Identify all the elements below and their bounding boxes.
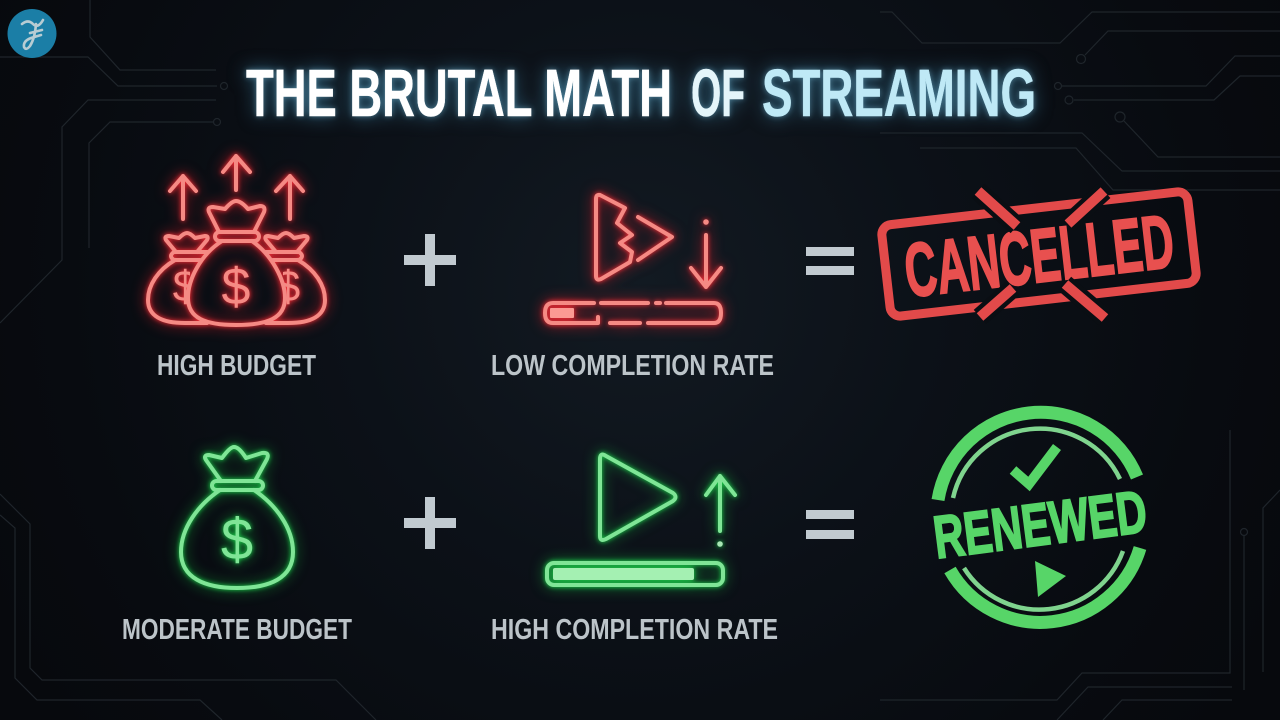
- title: OF: [691, 56, 745, 131]
- broken progress bar: [545, 303, 721, 323]
- arrow: centre up: [223, 156, 250, 190]
- arrow: left up: [170, 176, 196, 219]
- play triangle: [1035, 561, 1066, 597]
- label: moderate budget: MODERATE BUDGET: [122, 614, 352, 646]
- check mark: [1013, 447, 1057, 484]
- stamp: cancelled: [881, 191, 1197, 318]
- stamp word: RENEWED: [930, 478, 1151, 571]
- play triangle: [600, 455, 676, 540]
- icon: green money bag: $: [221, 507, 253, 572]
- title: THE BRUTAL MATH: [246, 56, 672, 131]
- arrow: right up: [276, 176, 303, 219]
- stamp: renewed: [930, 412, 1151, 622]
- centre bag: $: [222, 258, 251, 316]
- right bag: [265, 233, 325, 323]
- left bag: $: [173, 262, 197, 311]
- icon: red money bags with rising arrows: [148, 156, 325, 325]
- left bag: [148, 233, 208, 323]
- plus sign: bottom row: [404, 497, 456, 549]
- label: low completion rate: LOW COMPLETION RATE: [491, 350, 774, 382]
- icon: green money bag: [181, 447, 293, 588]
- progress bar: [547, 563, 723, 585]
- arrow: up: [706, 476, 735, 547]
- equals sign: top row: [806, 247, 854, 275]
- equals sign: bottom row: [806, 510, 854, 539]
- centre bag: [188, 201, 285, 325]
- title: STREAMING: [762, 56, 1036, 131]
- right bag: $: [276, 262, 300, 311]
- icon: green play button with rising arrow and full bar: [547, 455, 735, 585]
- broken play triangle: [596, 195, 632, 280]
- label: high completion rate: HIGH COMPLETION RATE: [491, 614, 778, 646]
- plus sign: top row: [404, 234, 456, 286]
- logo badge: [8, 9, 56, 58]
- crossed-out X strokes: [978, 191, 1105, 318]
- arrow: down: [691, 219, 721, 287]
- label: high budget: HIGH BUDGET: [157, 350, 316, 382]
- icon: broken play button with falling arrow and broken bar: [545, 195, 721, 323]
